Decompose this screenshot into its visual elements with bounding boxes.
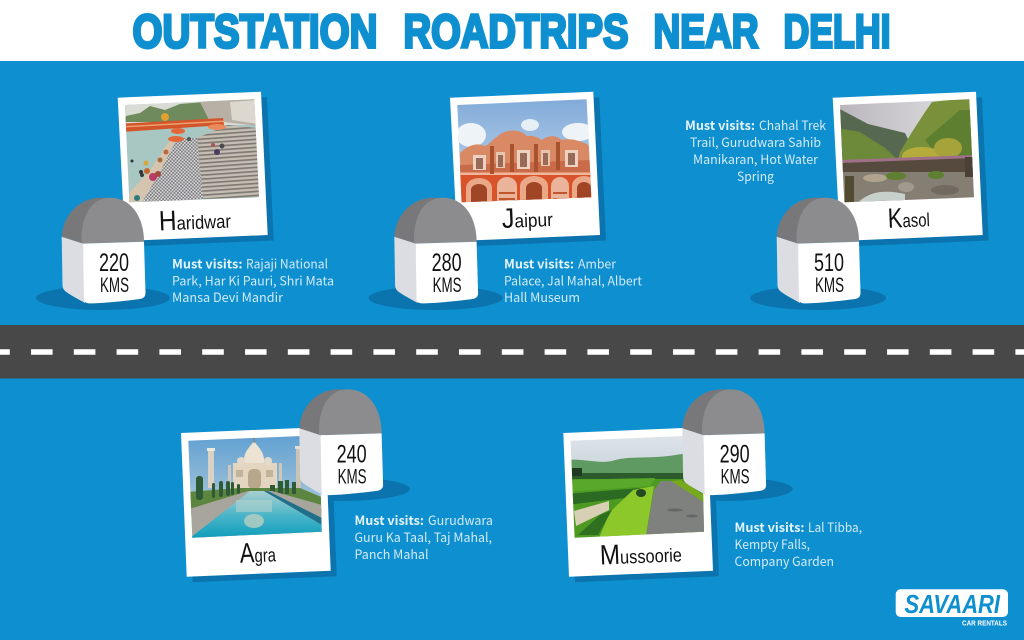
text: Mussoorie must visits: Must visits: (734, 517, 804, 536)
text: Kasol must visits: Trail, Gurudwara Sahib (690, 132, 821, 151)
caption: Agra: Agra (239, 536, 277, 569)
text: Agra must visits (354, 510, 493, 563)
milestone shadow: Jaipur (369, 286, 503, 310)
stop: Mussoorie (563, 389, 862, 582)
text: Jaipur must visits: Amber (578, 254, 616, 272)
milestone: 220 KMS: 220 (99, 249, 129, 277)
text: Mussoorie must visits: Lal Tibba, (808, 517, 862, 536)
text: Agra must visits: Gurudwara (428, 510, 493, 529)
text: Kasol must visits: Spring (737, 166, 774, 185)
caption: Jaipur: Jaipur (501, 201, 554, 234)
text: Kasol must visits: Manikaran, Hot Water (693, 149, 818, 168)
polaroid: Kasol (833, 92, 989, 246)
milestone: 220 KMS (62, 198, 146, 303)
milestone: 290 KMS: 290 (720, 441, 750, 469)
text: Haridwar must visits: Must visits: (172, 254, 242, 272)
text: Jaipur must visits (504, 254, 642, 306)
text: Haridwar must visits (172, 254, 334, 306)
title: OUTSTATION (132, 4, 378, 58)
logo: Savaari Car Rentals (896, 589, 1008, 628)
text: Jaipur must visits: Must visits: (504, 254, 574, 272)
text: Mussoorie must visits: Kempty Falls, (734, 534, 810, 553)
stop: Agra (181, 389, 493, 582)
milestone: 290 KMS: KMS (721, 466, 750, 489)
milestone: 510 KMS: 510 (814, 249, 844, 277)
polaroid: Agra (181, 427, 337, 582)
title (132, 4, 890, 58)
logo: Savaari Car Rentals: SAVAARI (904, 589, 1001, 619)
polaroid: Jaipur (450, 92, 606, 246)
header band (0, 0, 1024, 61)
text: Agra must visits: Must visits: (354, 510, 424, 529)
text: Mussoorie must visits (734, 517, 862, 570)
milestone: 280 KMS: KMS (433, 274, 462, 297)
text: Haridwar must visits: Rajaji National (246, 254, 328, 272)
photo: Agra Taj Mahal (185, 433, 325, 541)
photo: Haridwar ghats (125, 99, 259, 202)
milestone shadow: Mussoorie (655, 477, 793, 501)
milestone: 280 KMS (394, 198, 478, 303)
milestone: 240 KMS (299, 389, 383, 495)
caption: Mussoorie: Mussoorie (599, 536, 682, 571)
title: ROADTRIPS (404, 4, 628, 58)
text: Kasol must visits: Chahal Trek (759, 115, 826, 134)
text: Kasol must visits (685, 115, 826, 185)
milestone: 240 KMS: 240 (337, 441, 367, 469)
photo: Mussoorie road (566, 433, 708, 539)
logo: Savaari Car Rentals: CAR RENTALS (962, 618, 1007, 628)
text: Jaipur must visits: Palace, Jal Mahal, Albert (504, 270, 642, 290)
milestone: 290 KMS (682, 389, 766, 495)
text: Mussoorie must visits: Company Garden (734, 551, 834, 570)
polaroid: Haridwar (118, 92, 274, 246)
photo: Jaipur palace (457, 99, 592, 202)
milestone: 280 KMS: 280 (432, 249, 462, 277)
text: Agra must visits: Guru Ka Taal, Taj Mahal, (354, 527, 492, 546)
text: Kasol must visits: Must visits: (685, 115, 755, 134)
text: Agra must visits: Panch Mahal (354, 544, 428, 563)
title: DELHI (784, 4, 890, 58)
stop: Jaipur (369, 92, 642, 310)
milestone shadow: Agra (272, 477, 410, 501)
photo: Kasol valley (840, 99, 974, 202)
caption: Kasol: Kasol (887, 201, 930, 234)
stop: Haridwar (36, 92, 334, 310)
milestone: 510 KMS (777, 198, 860, 303)
polaroid: Mussoorie (563, 427, 719, 582)
milestone shadow: Kasol (750, 286, 886, 310)
milestone: 510 KMS: KMS (815, 274, 844, 297)
milestone: 220 KMS: KMS (100, 274, 129, 297)
text: Jaipur must visits: Hall Museum (504, 287, 580, 306)
text: Haridwar must visits: Park, Har Ki Pauri, Shri Mata (172, 270, 334, 290)
stop: Kasol (685, 92, 989, 310)
title: NEAR (654, 4, 758, 58)
milestone shadow: Haridwar (36, 286, 170, 310)
text: Haridwar must visits: Mansa Devi Mandir (172, 287, 283, 306)
road (0, 325, 1024, 378)
milestone: 240 KMS: KMS (338, 466, 367, 489)
caption: Haridwar: Haridwar (158, 203, 232, 236)
